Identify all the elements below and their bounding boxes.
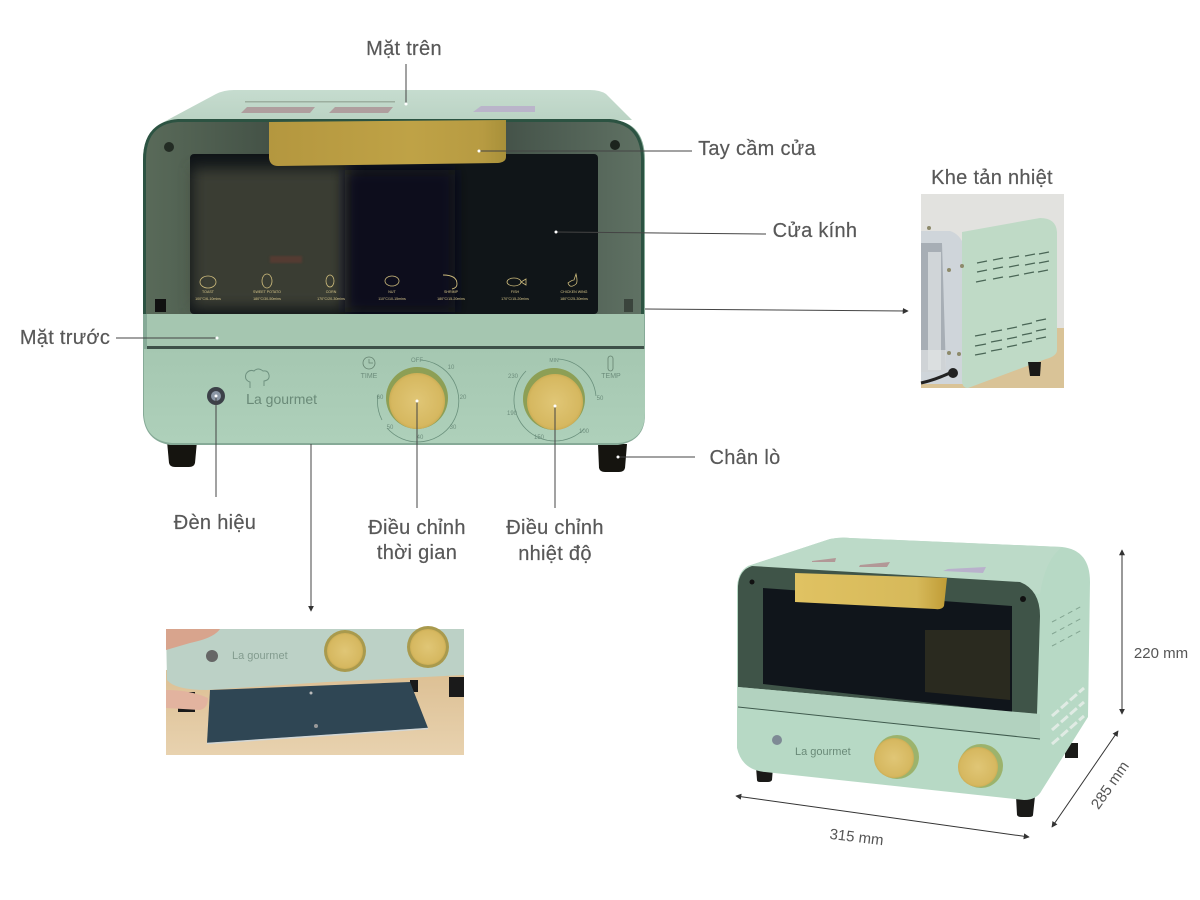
callout: Mặt trước: Mặt trước bbox=[20, 327, 110, 349]
toast: TOAST bbox=[202, 290, 215, 294]
temp label: TEMP bbox=[601, 373, 621, 380]
temperature dial bbox=[507, 358, 604, 441]
time label bbox=[361, 357, 378, 380]
time label: TIME bbox=[361, 373, 378, 380]
drawer photo bbox=[166, 626, 464, 755]
time dial: OFF bbox=[411, 358, 423, 364]
dimension: width 315 mm bbox=[736, 796, 1029, 849]
callout: Điều chỉnh thời gian bbox=[368, 400, 466, 564]
callout: Điều chỉnh thời gian: thời gian bbox=[377, 542, 457, 564]
power cord bbox=[921, 372, 952, 383]
dimension: width 315 mm: 315 mm bbox=[829, 826, 884, 849]
indicator and logo bbox=[206, 650, 218, 662]
callout: Tay cầm cửa bbox=[478, 138, 816, 160]
callout: Điều chỉnh thời gian: Điều chỉnh bbox=[368, 517, 466, 539]
shrimp: SHRIMP bbox=[444, 290, 459, 294]
nut bbox=[378, 276, 406, 301]
top face tint bbox=[748, 538, 1062, 594]
drawer photo: La gourmet bbox=[232, 650, 288, 662]
vent slots bbox=[975, 252, 1049, 355]
glass door bbox=[738, 566, 1040, 714]
time dial bbox=[377, 358, 467, 442]
time dial: 60 bbox=[377, 395, 384, 401]
logo: La gourmet bbox=[795, 746, 851, 758]
indicator bbox=[772, 735, 782, 745]
hand bbox=[166, 629, 220, 650]
temperature dial: 100 bbox=[579, 429, 590, 435]
callout: Chân lò bbox=[616, 447, 781, 469]
sweet potato: SWEET POTATO bbox=[253, 290, 281, 294]
arrow to drawer photo bbox=[310, 444, 312, 611]
temperature dial: 230 bbox=[508, 374, 519, 380]
handle bbox=[795, 573, 947, 609]
nut: NUT bbox=[388, 290, 396, 294]
temperature dial: MIN bbox=[549, 358, 559, 364]
dimension: depth 285 mm bbox=[1052, 731, 1133, 827]
side vents bbox=[1052, 606, 1084, 744]
dimension: depth 285 mm: 285 mm bbox=[1088, 758, 1133, 812]
shrimp bbox=[437, 275, 465, 301]
time dial: 50 bbox=[387, 425, 394, 431]
dimension: height 220 mm: 220 mm bbox=[1134, 645, 1188, 662]
indicator light bbox=[207, 387, 225, 405]
chicken wing bbox=[560, 274, 588, 301]
glass door bbox=[143, 119, 644, 314]
rear metal panel bbox=[921, 231, 964, 384]
inner dark window bbox=[190, 154, 598, 314]
food guide icons bbox=[195, 274, 588, 301]
foot bbox=[1028, 362, 1041, 376]
knobs bbox=[875, 735, 919, 779]
corn: 170°C/20-30mins bbox=[317, 297, 345, 301]
screws bbox=[927, 226, 964, 356]
brand logo bbox=[246, 369, 317, 408]
side panel bbox=[962, 218, 1057, 388]
oven feet bbox=[167, 441, 627, 472]
corn: CORN bbox=[326, 290, 337, 294]
front feet bbox=[756, 767, 773, 782]
brand logo: a gourmet bbox=[254, 391, 317, 407]
callout: Mặt trước bbox=[20, 327, 218, 349]
time dial: 40 bbox=[417, 435, 424, 441]
callout: Điều chỉnh nhiệt độ: nhiệt độ bbox=[518, 543, 592, 565]
time dial: 20 bbox=[460, 395, 467, 401]
sweet potato bbox=[253, 274, 281, 301]
oven top face bbox=[160, 90, 632, 124]
lower strip bbox=[738, 687, 1040, 738]
shrimp: 180°C/15-20mins bbox=[437, 297, 465, 301]
callout: Đèn hiệu: Đèn hiệu bbox=[174, 512, 256, 534]
front panel bbox=[166, 629, 464, 690]
top decals bbox=[812, 558, 986, 573]
top and side shell bbox=[737, 538, 1090, 800]
crumb tray bbox=[207, 682, 428, 743]
wood surface bbox=[921, 328, 1064, 388]
brand logo: L bbox=[246, 391, 254, 408]
callout: Đèn hiệu bbox=[174, 394, 256, 534]
toast bbox=[195, 276, 221, 301]
time dial: 30 bbox=[450, 425, 457, 431]
chicken wing: CHICKEN WING bbox=[561, 290, 588, 294]
knobs bbox=[324, 630, 366, 672]
fish: 170°C/15-20mins bbox=[501, 297, 529, 301]
chicken wing: 180°C/25-30mins bbox=[560, 297, 588, 301]
side vent heading: Khe tản nhiệt bbox=[931, 167, 1053, 189]
oven angled view bbox=[737, 538, 1090, 817]
temp label bbox=[601, 356, 621, 380]
control panel bbox=[144, 349, 645, 443]
door handle bbox=[269, 120, 506, 166]
oven body shell bbox=[143, 120, 645, 445]
sweet potato: 180°C/30-50mins bbox=[253, 297, 281, 301]
callout: Điều chỉnh nhiệt độ: Điều chỉnh bbox=[506, 517, 604, 539]
door lower strip bbox=[147, 314, 644, 347]
temperature dial: 150 bbox=[534, 435, 545, 441]
temperature dial: 190 bbox=[507, 411, 518, 417]
callout: Mặt trên bbox=[366, 38, 442, 106]
main oven front view bbox=[143, 90, 645, 472]
corn bbox=[317, 275, 345, 301]
callout: Chân lò: Chân lò bbox=[709, 447, 781, 469]
temperature dial: 50 bbox=[597, 396, 604, 402]
callout: Cửa kính: Cửa kính bbox=[773, 220, 857, 242]
oven feet in photo bbox=[178, 677, 464, 712]
callout: Điều chỉnh nhiệt độ bbox=[506, 404, 604, 565]
fish bbox=[501, 278, 529, 301]
callout: Tay cầm cửa: Tay cầm cửa bbox=[698, 138, 816, 160]
callout: Cửa kính bbox=[554, 220, 857, 242]
nut: 110°C/10-15mins bbox=[378, 297, 406, 301]
toast: 100°C/6-10mins bbox=[195, 297, 221, 301]
back feet bbox=[1065, 743, 1078, 758]
arrow to side photo bbox=[645, 309, 908, 311]
callout: Mặt trên: Mặt trên bbox=[366, 38, 442, 60]
time dial: 10 bbox=[448, 365, 455, 371]
side vent photo bbox=[921, 194, 1064, 388]
fish: FISH bbox=[511, 290, 519, 294]
